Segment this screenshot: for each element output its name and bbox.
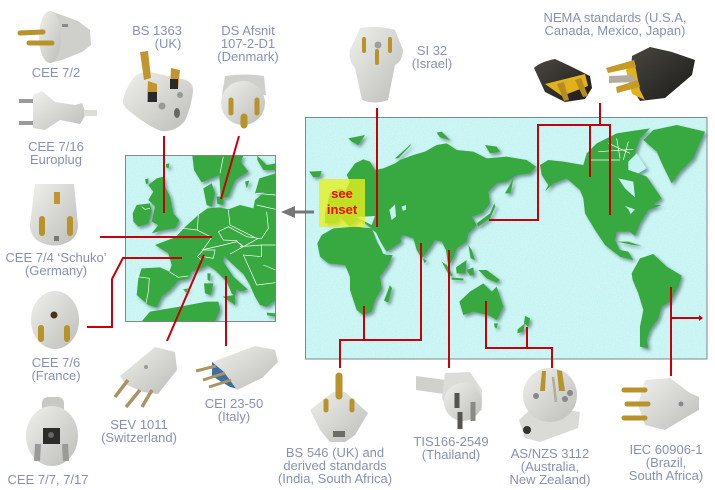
icon: BS 546 plug — [310, 376, 368, 442]
icon: Europlug — [19, 91, 97, 130]
icon: Brazilian plug — [624, 378, 699, 430]
label: TIS166-2549 — [413, 434, 489, 449]
icon: Israeli plug — [350, 27, 403, 102]
label: DS Afsnit — [221, 23, 275, 38]
plug: CEE 7/16 Europlug — [19, 91, 97, 167]
label — [278, 445, 392, 486]
icon: French plug — [31, 291, 79, 349]
label: (Italy) — [218, 409, 250, 424]
label — [205, 396, 263, 424]
plug: CEE 7/6 — [31, 291, 81, 383]
callout: see inset: inset — [327, 202, 358, 217]
plug: AS/NZS 3112 — [510, 368, 590, 487]
icon: Italian plug — [196, 346, 278, 390]
label — [101, 417, 177, 445]
label: CEI 23-50 — [205, 396, 263, 411]
label: (Australia, — [521, 459, 579, 474]
label — [510, 446, 590, 487]
plug: TIS166-2549 — [413, 372, 489, 462]
label: CEE 7/16 — [28, 139, 84, 154]
label: Canada, Mexico, Japan) — [545, 23, 685, 38]
plug: BS 1363 — [123, 23, 193, 131]
label: (India, South Africa) — [278, 471, 392, 486]
arrow: world map to Europe inset — [281, 206, 314, 218]
icon: Australian plug — [519, 368, 580, 442]
label: CEE 7/2 — [32, 65, 80, 80]
plug: CEE 7/2 — [20, 11, 91, 80]
connector lines: world map — [340, 103, 703, 376]
label: CEE 7/6 — [32, 355, 80, 370]
callout: see inset: see — [331, 186, 353, 201]
label — [217, 23, 279, 64]
label: (France) — [31, 368, 81, 383]
label: South Africa) — [629, 468, 703, 483]
plug: CEE 7/7, 7/17 — [8, 397, 88, 487]
plug: NEMA standards — [534, 10, 695, 102]
panel: Europe inset map — [126, 156, 276, 322]
label: (Thailand) — [422, 447, 480, 462]
plug: DS Afsnit 107-2-D1 — [217, 23, 279, 125]
label: SEV 1011 — [110, 417, 168, 432]
plug: CEE 7/4 Schuko — [5, 184, 107, 278]
icon: NEMA three-pin plug — [606, 47, 695, 101]
label: (UK) — [155, 36, 181, 51]
plug: SEV 1011 — [101, 347, 177, 445]
water cutouts — [350, 153, 647, 254]
icon: Schuko plug — [30, 184, 78, 246]
plug: CEI 23-50 — [196, 346, 278, 424]
label — [132, 23, 182, 51]
label: New Zealand) — [510, 472, 590, 487]
icon: Swiss plug — [115, 347, 177, 407]
icon: NEMA two-pin plug — [534, 59, 592, 102]
label: BS 546 (UK) and — [286, 445, 384, 460]
connector lines: Europe — [87, 136, 239, 346]
label: IEC 60906-1 — [630, 442, 702, 457]
icon: hybrid plug — [26, 397, 78, 466]
label: NEMA standards (U.S.A, — [543, 10, 687, 25]
label: (Israel) — [412, 56, 452, 71]
plug: SI 32 — [350, 27, 452, 102]
label — [31, 355, 81, 383]
label: (Brazil, — [646, 455, 686, 470]
arctic channels — [590, 138, 633, 160]
icon: Thai plug — [416, 372, 482, 429]
label — [412, 43, 452, 71]
label: derived standards — [283, 458, 387, 473]
icon: BS 1363 plug — [123, 51, 193, 131]
label: CEE 7/7, 7/17 — [8, 472, 88, 487]
label — [28, 139, 84, 167]
label: BS 1363 — [132, 23, 182, 38]
label: Europlug — [30, 152, 82, 167]
label: AS/NZS 3112 — [511, 446, 589, 461]
label — [413, 434, 489, 462]
label: 107-2-D1 — [221, 36, 275, 51]
label: SI 32 — [417, 43, 447, 58]
plug: IEC 60906-1 — [624, 378, 703, 483]
plug: BS 546 — [278, 376, 392, 486]
label — [543, 10, 687, 38]
label: (Germany) — [25, 263, 87, 278]
label: CEE 7/4 ‘Schuko’ — [5, 250, 107, 265]
world landmasses — [309, 125, 705, 348]
label — [629, 442, 703, 483]
label: (Denmark) — [217, 49, 279, 64]
label: (Switzerland) — [101, 430, 177, 445]
icon: Danish plug — [221, 74, 266, 125]
label — [5, 250, 107, 278]
Europe landmasses — [133, 156, 276, 321]
panel: world map — [306, 118, 707, 359]
icon: CEE 7/2 plug — [20, 11, 91, 63]
callout: see inset — [319, 179, 365, 227]
